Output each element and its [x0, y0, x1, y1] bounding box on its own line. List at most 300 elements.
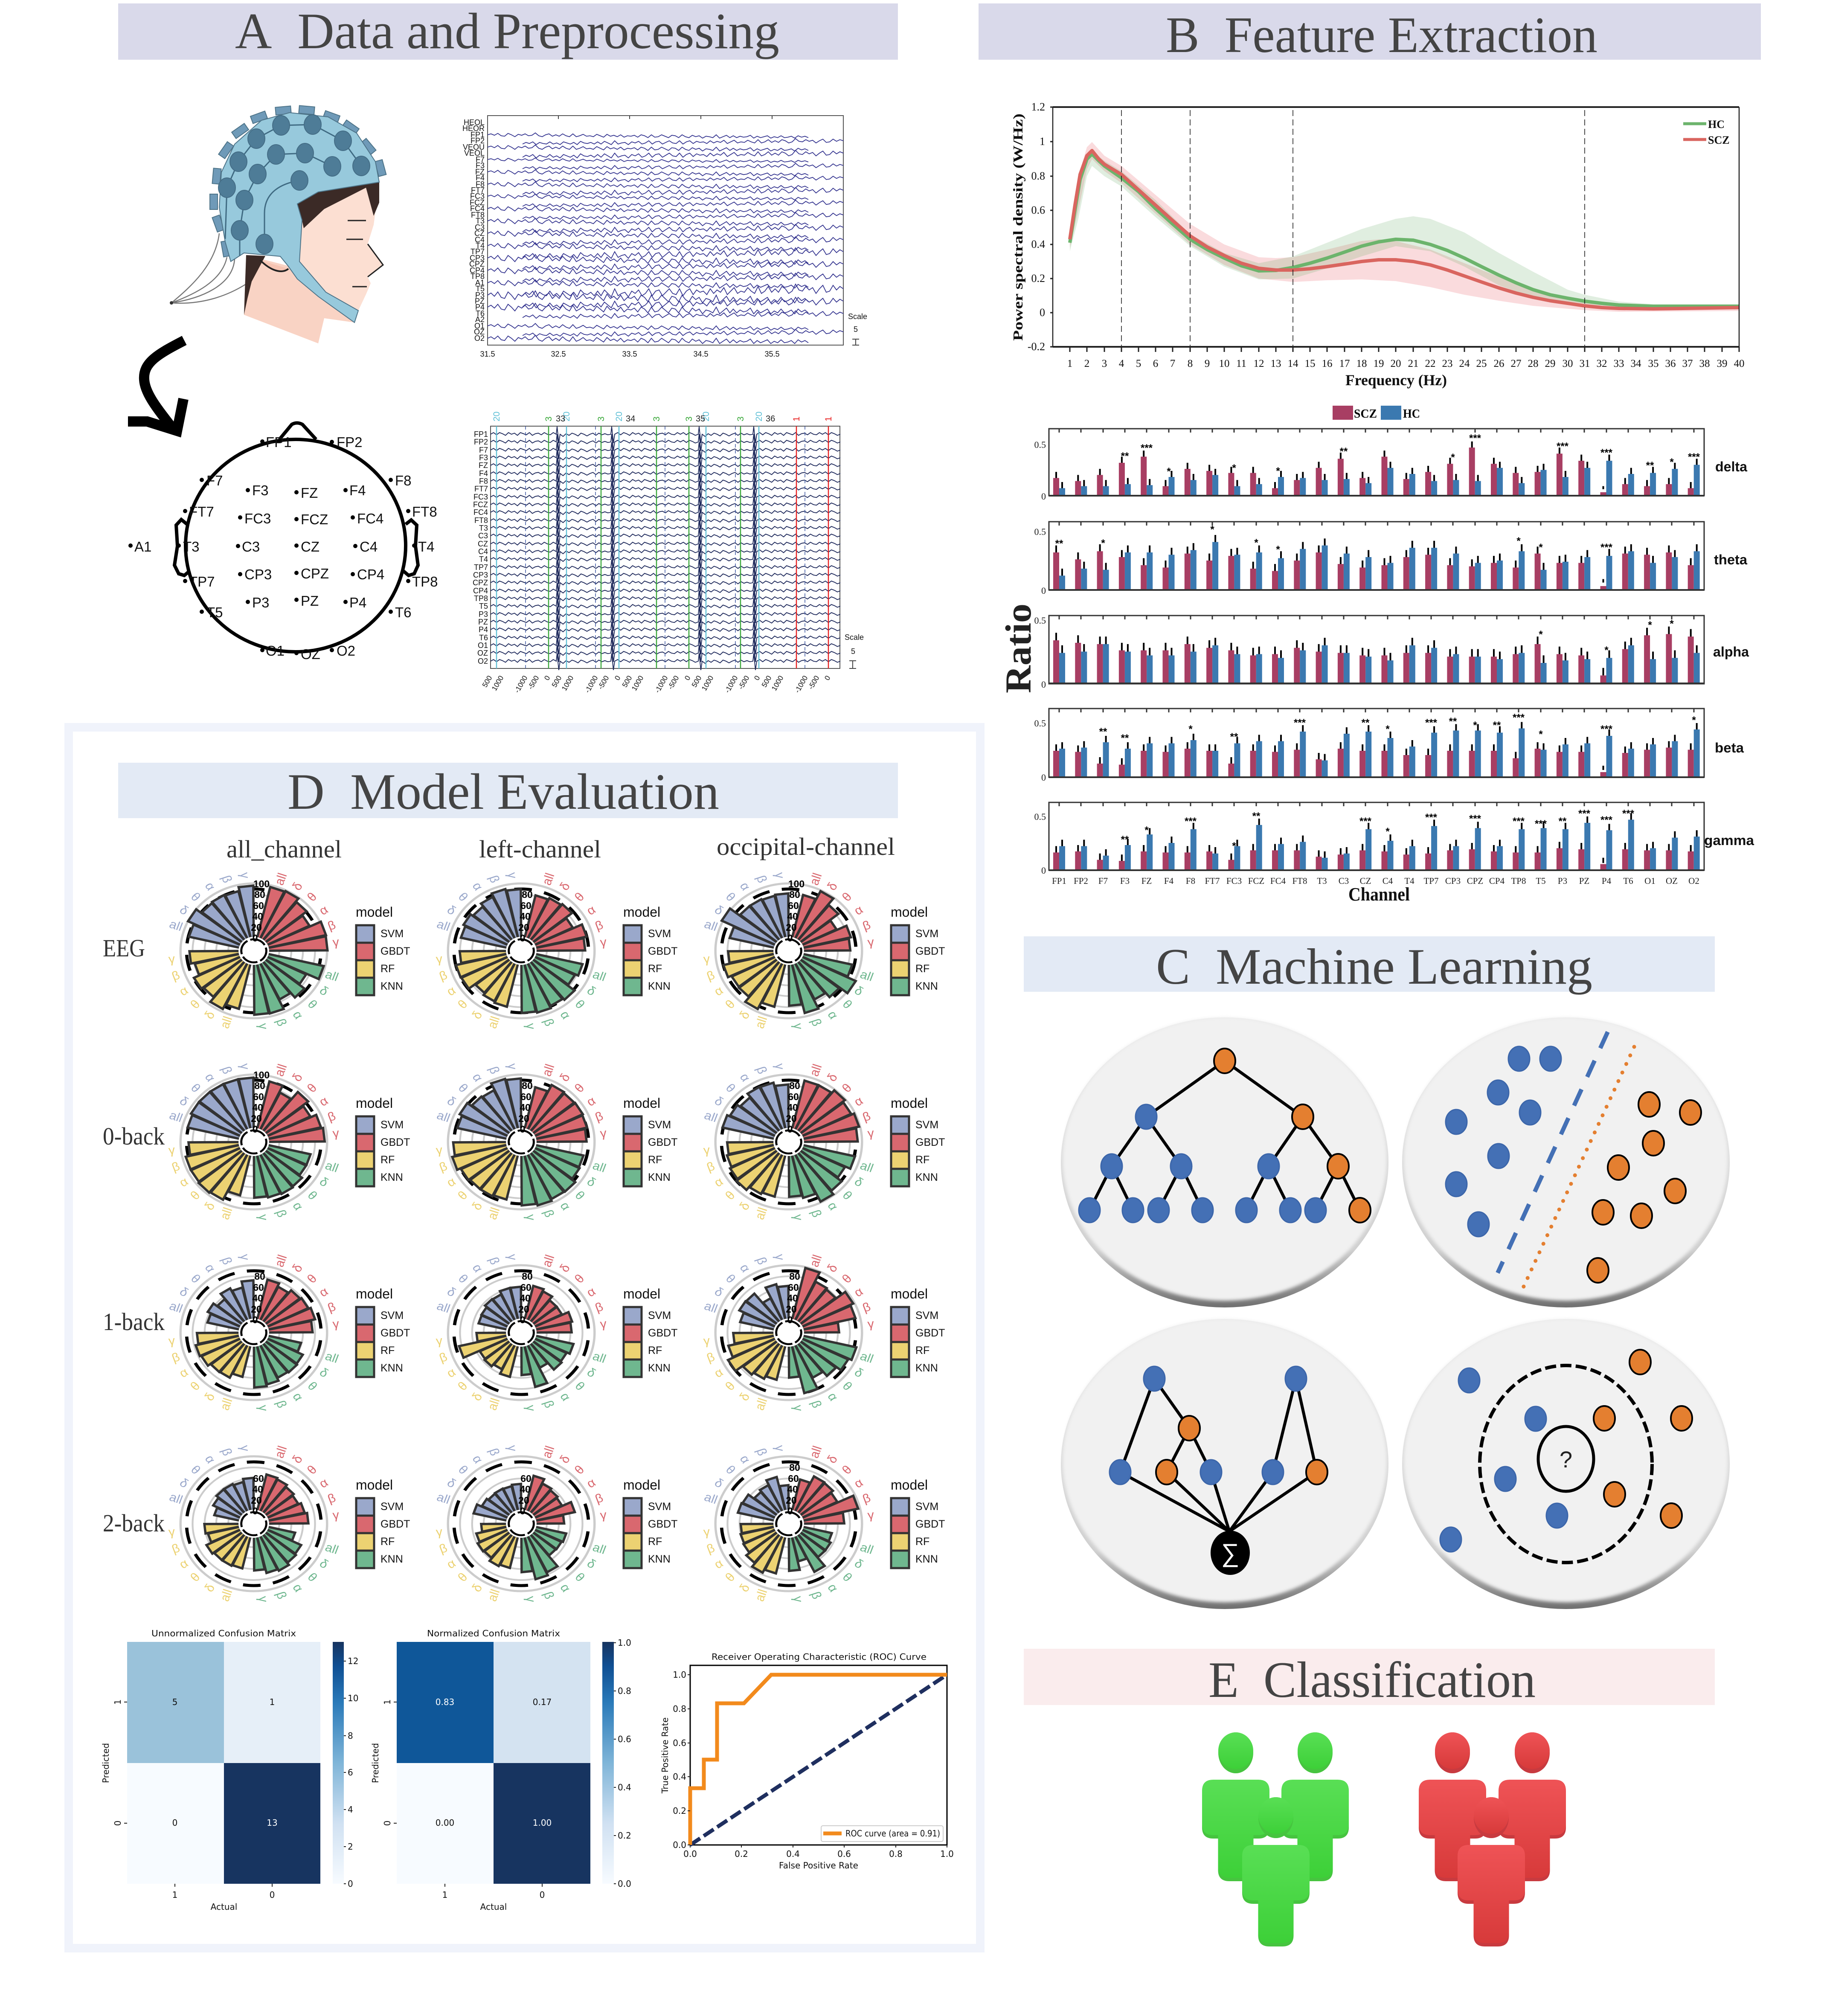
bar chart: gamma band: *: [1144, 825, 1149, 836]
rosette: 1-back left-channel: 0: [520, 1314, 525, 1325]
chart: epoched EEG traces with event markers: O1: [478, 641, 488, 650]
chart: epoched EEG traces with event markers: 1000: [560, 674, 575, 692]
rosette: 0-back occipital-channel: all: [807, 1063, 825, 1078]
bar chart: alpha band: 0.5: [1034, 615, 1046, 626]
chart: power spectral density HC vs SCZ: 26: [1494, 358, 1504, 369]
chart: normalized confusion matrix: 0.83: [436, 1697, 454, 1707]
chart: normalized confusion matrix: 0.2: [618, 1830, 631, 1841]
diagram: 10-20 electrode layout: T3: [183, 539, 200, 555]
rosette: 1-back occipital-channel: γ: [790, 1404, 805, 1412]
legend: SCZ and HC bars: HC: [1403, 407, 1420, 421]
rosette: 1-back occipital-channel: θ: [839, 1272, 855, 1286]
bar chart: delta band: ***: [1141, 442, 1153, 454]
chart: epoched EEG traces with event markers: CP4: [473, 587, 488, 595]
diagram: random forest ensemble: [1061, 1319, 1388, 1609]
bar chart: gamma band: gamma: [1704, 833, 1754, 848]
rosette: 1-back left-channel: β: [593, 1300, 605, 1315]
rosette: 2-back occipital-channel: 40: [787, 1484, 798, 1495]
rosette: 1-back occipital-channel: δ: [825, 1262, 840, 1275]
chart: ROC curve: 0.2: [673, 1806, 686, 1816]
rosette: 2-back occipital-channel: δ: [852, 1557, 866, 1572]
chart: epoched EEG traces with event markers: 500: [760, 674, 773, 689]
chart: raw continuous EEG traces: 32.5: [551, 350, 566, 358]
chart: ROC curve: 0.8: [673, 1704, 686, 1714]
bar chart: delta band: ***: [1688, 451, 1700, 463]
chart: normalized confusion matrix: 0.4: [618, 1782, 631, 1792]
chart: raw continuous EEG traces: T5: [476, 285, 485, 293]
rosette: EEG left-channel: δ: [470, 1009, 485, 1022]
axis: EEG channel names: FT7: [1205, 876, 1220, 886]
rosette: EEG left-channel: γ: [435, 953, 443, 966]
chart: epoched EEG traces with event markers: FP1: [474, 430, 488, 439]
chart: epoched EEG traces with event markers: [473, 412, 864, 694]
bar chart: delta band: 0: [1041, 491, 1046, 502]
heading: A Data and Preprocessing: [118, 3, 898, 60]
chart: unnormalized confusion matrix: Predicted: [101, 1743, 111, 1783]
rosette: 0-back occipital-channel: β: [861, 1110, 872, 1124]
rosette: EEG occipital-channel: γ: [772, 871, 787, 879]
rosette: 0-back all_channel: 0: [253, 1124, 258, 1135]
rosette: 1-back left-channel: θ: [572, 1272, 587, 1286]
rosette: EEG left-channel: β: [438, 969, 449, 983]
chart: epoched EEG traces with event markers: F8: [479, 477, 488, 485]
bar chart: delta band: *: [1670, 456, 1674, 468]
rosette: 1-back all_channel: all: [323, 1350, 340, 1366]
rosette: 1-back all_channel: δ: [177, 1285, 191, 1300]
rosette: 0-back left-channel: γ: [435, 1144, 443, 1157]
rosette: 2-back occipital-channel: α: [712, 1557, 726, 1572]
rosette: EEG left-channel: [435, 871, 677, 1030]
rosette: EEG left-channel: 20: [518, 922, 529, 933]
chart: power spectral density HC vs SCZ: 37: [1682, 358, 1693, 369]
rosette: 0-back occipital-channel: δ: [737, 1200, 753, 1213]
chart: raw continuous EEG traces: F8: [476, 180, 485, 189]
chart: epoched EEG traces with event markers: TP8: [474, 594, 488, 603]
bar chart: gamma band: **: [1121, 834, 1129, 845]
chart: raw continuous EEG traces: CP3: [470, 254, 485, 262]
bar chart: alpha band: alpha: [1713, 644, 1749, 659]
rosette: 0-back left-channel: KNN: [648, 1171, 671, 1183]
axis label: Channel: Channel: [1348, 884, 1410, 905]
rosette: EEG left-channel: α: [557, 1009, 573, 1022]
bar chart: delta band: ***: [1557, 441, 1569, 452]
chart: power spectral density HC vs SCZ: 2: [1084, 358, 1089, 369]
bar chart: delta band: 0.5: [1034, 439, 1046, 450]
bar chart: delta band: *: [1276, 465, 1280, 477]
chart: epoched EEG traces with event markers: -1000: [793, 674, 809, 694]
chart: power spectral density HC vs SCZ: 10: [1219, 358, 1229, 369]
rosette: 2-back left-channel: θ: [455, 1463, 471, 1477]
rosette: 2-back all_channel: all: [218, 1588, 235, 1603]
rosette: 0-back left-channel: δ: [470, 1200, 485, 1213]
rosette: 0-back all_channel: γ: [256, 1214, 270, 1221]
heading: B Feature Extraction: [979, 3, 1761, 63]
rosette: 1-back occipital-channel: KNN: [915, 1362, 938, 1374]
chart: epoched EEG traces with event markers: F4: [479, 469, 488, 478]
rosette: 1-back occipital-channel: SVM: [915, 1310, 938, 1322]
rosette: 1-back left-channel: GBDT: [648, 1327, 677, 1339]
rosette: 0-back all_channel: θ: [188, 1189, 203, 1203]
bar chart: theta band: [1034, 522, 1747, 596]
rosette: 0-back left-channel: α: [469, 1071, 485, 1084]
rosette: EEG all_channel: θ: [305, 998, 320, 1011]
rosette: 0-back left-channel: RF: [648, 1154, 662, 1166]
rosette: 0-back left-channel: 80: [522, 1080, 533, 1091]
rosette: 1-back left-channel: 80: [522, 1271, 533, 1282]
diagram: 10-20 electrode layout: T4: [418, 539, 435, 555]
rosette: 1-back occipital-channel: δ: [712, 1285, 726, 1300]
rosette: 0-back occipital-channel: α: [712, 1175, 726, 1190]
bar chart: gamma band: **: [1559, 816, 1567, 827]
chart: raw continuous EEG traces: VEOU: [463, 143, 485, 151]
diagram: 10-20 electrode layout: C4: [360, 539, 378, 555]
rosette: 2-back all_channel: SVM: [380, 1501, 404, 1513]
rosette: EEG all_channel: KNN: [380, 980, 403, 992]
diagram: k nearest neighbours: [1402, 1319, 1730, 1609]
chart: epoched EEG traces with event markers: T4: [479, 555, 488, 564]
rosette: EEG all_channel: δ: [177, 903, 191, 918]
rosette: EEG all_channel: δ: [290, 880, 305, 893]
rosette: 2-back occipital-channel: 80: [789, 1462, 800, 1473]
rosette: EEG occipital-channel: θ: [839, 998, 855, 1011]
chart: epoched EEG traces with event markers: FP2: [474, 438, 488, 446]
rosette: EEG left-channel: θ: [455, 890, 471, 904]
rosette: 2-back occipital-channel: model: [891, 1477, 928, 1493]
rosette: 2-back left-channel: α: [557, 1582, 573, 1595]
rosette: 1-back occipital-channel: 80: [789, 1271, 800, 1282]
chart: raw continuous EEG traces: HEOL: [464, 118, 485, 127]
rosette: 0-back occipital-channel: γ: [703, 1144, 711, 1157]
rosette: 0-back all_channel: KNN: [380, 1171, 403, 1183]
chart: epoched EEG traces with event markers: 1: [824, 416, 834, 421]
chart: unnormalized confusion matrix: 0: [348, 1879, 353, 1889]
rosette: EEG all_channel: RF: [380, 963, 395, 975]
chart: ROC curve: 0.0: [683, 1849, 697, 1859]
chart: raw continuous EEG traces: [462, 116, 867, 358]
diagram: 10-20 electrode layout: CP4: [357, 566, 384, 582]
rosette: 1-back left-channel: γ: [435, 1334, 443, 1348]
rosette: EEG all_channel: δ: [202, 1009, 218, 1022]
rosette: 1-back left-channel: model: [623, 1286, 660, 1301]
chart: power spectral density HC vs SCZ: 1.2: [1031, 101, 1045, 113]
diagram: 10-20 electrode layout: FCZ: [301, 511, 328, 527]
diagram: 10-20 electrode layout: FP1: [266, 434, 292, 450]
bar chart: beta band: ***: [1600, 723, 1613, 735]
rosette: 0-back left-channel: γ: [599, 1127, 607, 1140]
bar chart: alpha band: 0: [1041, 679, 1046, 690]
rosette: EEG occipital-channel: all: [702, 918, 719, 934]
bar chart: gamma band: ***: [1578, 808, 1591, 819]
rosette: EEG occipital-channel: γ: [867, 935, 875, 949]
chart: epoched EEG traces with event markers: 0: [823, 674, 832, 682]
axis: EEG channel names: FC3: [1226, 876, 1242, 886]
rosette: 1-back left-channel: α: [469, 1262, 485, 1275]
rosette: 0-back left-channel: 20: [518, 1113, 529, 1124]
heading: C Machine Learning: C Machine Learning: [1156, 938, 1592, 995]
rosette: 0-back occipital-channel: δ: [825, 1071, 840, 1084]
chart: epoched EEG traces with event markers: CZ: [478, 540, 488, 548]
rosette: EEG left-channel: θ: [455, 998, 471, 1011]
diagram: 10-20 electrode layout: CP3: [244, 566, 272, 582]
chart: epoched EEG traces with event markers: FC3: [473, 493, 488, 501]
chart: epoched EEG traces with event markers: 5: [851, 647, 855, 656]
rosette: 1-back all_channel: [167, 1253, 410, 1412]
chart: raw continuous EEG traces: TP7: [471, 247, 485, 256]
rosette: 2-back all_channel: α: [290, 1582, 306, 1595]
rosette: 0-back occipital-channel: all: [858, 1159, 875, 1175]
rosette: 1-back all_channel: α: [202, 1262, 218, 1275]
rosette: EEG occipital-channel: α: [737, 880, 753, 893]
rosette: EEG occipital-channel: γ: [790, 1023, 805, 1030]
axis: EEG channel names: FC4: [1270, 876, 1286, 886]
rosette: 0-back occipital-channel: β: [753, 1065, 770, 1076]
rosette: 0-back all_channel: model: [356, 1095, 393, 1111]
chart: epoched EEG traces with event markers: 0: [752, 674, 761, 682]
rosette: EEG left-channel: γ: [505, 871, 520, 879]
rosette: 1-back occipital-channel: α: [737, 1262, 753, 1275]
rosette: EEG occipital-channel: γ: [703, 953, 711, 966]
rosette: 2-back all_channel: β: [326, 1491, 337, 1506]
axis: EEG channel names: TP8: [1511, 876, 1526, 886]
rosette: 1-back all_channel: KNN: [380, 1362, 403, 1374]
rosette: 0-back occipital-channel: all: [702, 1109, 719, 1125]
rosette: 1-back all_channel: SVM: [380, 1310, 404, 1322]
rosette: EEG all_channel: all: [323, 968, 340, 984]
rosette: 2-back left-channel: γ: [599, 1508, 607, 1522]
rosette: 1-back all_channel: α: [290, 1391, 306, 1403]
rosette: 0-back left-channel: all: [540, 1063, 558, 1078]
rosette: 1-back occipital-channel: θ: [723, 1272, 738, 1286]
rosette: 1-back left-channel: KNN: [648, 1362, 671, 1374]
rosette: 2-back left-channel: RF: [648, 1536, 662, 1548]
panel: D Model Evaluation frame: [69, 727, 980, 1948]
chart: power spectral density HC vs SCZ: [1010, 101, 1745, 389]
rosette: 0-back left-channel: 40: [520, 1102, 531, 1113]
rosette: 2-back occipital-channel: α: [737, 1453, 753, 1466]
chart: power spectral density HC vs SCZ: 6: [1153, 358, 1158, 369]
rosette: 1-back occipital-channel: θ: [839, 1380, 855, 1393]
chart: raw continuous EEG traces: C4: [475, 235, 485, 244]
chart: epoched EEG traces with event markers: TP7: [474, 563, 488, 572]
bar chart: theta band: ***: [1600, 542, 1613, 553]
chart: raw continuous EEG traces: Scale: [848, 312, 867, 321]
rosette: 1-back occipital-channel: model: [891, 1286, 928, 1301]
chart: power spectral density HC vs SCZ: SCZ: [1708, 134, 1730, 146]
rosette: 0-back left-channel: θ: [572, 1081, 587, 1095]
rosette: 1-back all_channel: β: [326, 1300, 337, 1315]
axis: EEG channel names: CZ: [1360, 876, 1371, 886]
rosette: 0-back all_channel: SVM: [380, 1119, 404, 1131]
rosette: EEG all_channel: 100: [253, 878, 270, 889]
rosette: 1-back all_channel: GBDT: [380, 1327, 410, 1339]
chart: power spectral density HC vs SCZ: Frequency (Hz): [1345, 372, 1447, 389]
chart: power spectral density HC vs SCZ: HC: [1708, 118, 1725, 131]
chart: raw continuous EEG traces: T3: [476, 217, 485, 225]
rosette: 2-back left-channel: SVM: [648, 1501, 671, 1513]
rosette: 0-back all_channel: β: [170, 1160, 182, 1174]
rosette: 2-back occipital-channel: β: [753, 1447, 770, 1458]
diagram: 10-20 electrode layout: T5: [206, 604, 223, 620]
rosette: 1-back occipital-channel: [702, 1253, 945, 1412]
rosette: 0-back left-channel: δ: [557, 1071, 573, 1084]
rosette: 1-back all_channel: model: [356, 1286, 393, 1301]
rosette: 0-back all_channel: θ: [188, 1081, 203, 1095]
chart: power spectral density HC vs SCZ: 24: [1459, 358, 1470, 369]
rosette: 0-back occipital-channel: α: [852, 1094, 866, 1109]
rosette: 0-back all_channel: RF: [380, 1154, 395, 1166]
diagram: 10-20 electrode layout: FT8: [412, 504, 437, 520]
bar chart: beta band: **: [1362, 717, 1370, 729]
rosette: 1-back occipital-channel: 40: [787, 1293, 798, 1304]
rosette: 0-back left-channel: γ: [505, 1063, 520, 1070]
rosette: 0-back left-channel: [435, 1063, 677, 1221]
chart: raw continuous EEG traces: HEOR: [462, 124, 485, 133]
rosette: 2-back occipital-channel: θ: [839, 1463, 855, 1477]
rosette: 1-back left-channel: RF: [648, 1345, 662, 1357]
diagram: 10-20 electrode layout: FT7: [189, 504, 214, 520]
rosette: 1-back occipital-channel: δ: [737, 1391, 753, 1403]
bar chart: beta band: *: [1385, 723, 1390, 735]
rosette: 0-back all_channel: all: [218, 1206, 235, 1221]
chart: power spectral density HC vs SCZ: 22: [1425, 358, 1436, 369]
rosette: EEG all_channel: all: [218, 1015, 235, 1030]
column and row titles: occipital-channel: [717, 833, 895, 860]
rosette: 2-back all_channel: β: [170, 1542, 182, 1556]
chart: epoched EEG traces with event markers: PZ: [478, 618, 488, 626]
rosette: 1-back all_channel: all: [272, 1253, 290, 1269]
chart: raw continuous EEG traces: FCZ: [470, 198, 485, 207]
chart: raw continuous EEG traces: F4: [476, 174, 485, 182]
rosette: 2-back left-channel: θ: [572, 1463, 587, 1477]
chart: unnormalized confusion matrix: 10: [348, 1693, 358, 1703]
chart: normalized confusion matrix: 0: [382, 1821, 392, 1826]
rosette: 0-back occipital-channel: δ: [852, 1175, 866, 1190]
rosette: 1-back occipital-channel: 0: [787, 1314, 793, 1325]
chart: epoched EEG traces with event markers: 1000: [490, 674, 505, 692]
chart: epoched EEG traces with event markers: CP3: [473, 571, 488, 579]
rosette: 2-back occipital-channel: RF: [915, 1536, 929, 1548]
rosette: 1-back all_channel: θ: [188, 1272, 203, 1286]
rosette: 0-back occipital-channel: 80: [789, 1080, 800, 1091]
chart: epoched EEG traces with event markers: Scale: [845, 633, 864, 642]
chart: unnormalized confusion matrix: 1: [172, 1890, 177, 1900]
rosette: 0-back occipital-channel: [702, 1063, 945, 1221]
chart: unnormalized confusion matrix: 0: [270, 1890, 275, 1900]
chart: power spectral density HC vs SCZ: 33: [1613, 358, 1624, 369]
rosette: 0-back left-channel: model: [623, 1095, 660, 1111]
diagram: random forest ensemble: ∑: [1221, 1539, 1239, 1567]
rosette: 2-back left-channel: θ: [455, 1571, 471, 1584]
rosette: 1-back left-channel: δ: [584, 1365, 598, 1380]
chart: ROC curve: ROC curve (area = 0.91): [845, 1828, 940, 1839]
rosette: EEG occipital-channel: β: [705, 969, 717, 983]
column and row titles: EEG: [103, 934, 145, 962]
axis: EEG channel names: O1: [1644, 876, 1656, 886]
chart: raw continuous EEG traces: F3: [476, 161, 485, 170]
bar chart: delta band: *: [1167, 466, 1171, 477]
rosette: 0-back all_channel: 100: [253, 1069, 270, 1081]
bar chart: beta band: 0.5: [1034, 718, 1046, 729]
rosette: 2-back left-channel: model: [623, 1477, 660, 1493]
rosette: 1-back left-channel: γ: [523, 1404, 538, 1412]
diagram: 10-20 electrode layout: F4: [349, 482, 366, 498]
rosette: 0-back all_channel: α: [290, 1200, 306, 1213]
rosette: 0-back occipital-channel: θ: [839, 1081, 855, 1095]
rosette: EEG left-channel: RF: [648, 963, 662, 975]
bar chart: beta band: **: [1493, 720, 1501, 731]
rosette: EEG all_channel: β: [218, 874, 235, 885]
rosette: EEG occipital-channel: θ: [723, 890, 738, 904]
bar chart: theta band: *: [1210, 524, 1214, 535]
axis: EEG channel names: C3: [1339, 876, 1349, 886]
arrow: from head to electrode map: [128, 340, 184, 431]
rosette: 0-back left-channel: θ: [455, 1081, 471, 1095]
rosette: 0-back left-channel: δ: [584, 1175, 598, 1190]
rosette: 2-back all_channel: δ: [177, 1476, 191, 1491]
rosette: 1-back occipital-channel: δ: [852, 1365, 866, 1380]
rosette: 1-back all_channel: θ: [188, 1380, 203, 1393]
rosette: 2-back occipital-channel: β: [705, 1542, 717, 1556]
rosette: 1-back all_channel: β: [218, 1255, 235, 1267]
rosette: 2-back occipital-channel: SVM: [915, 1501, 938, 1513]
chart: power spectral density HC vs SCZ: 30: [1562, 358, 1573, 369]
chart: power spectral density HC vs SCZ: 21: [1408, 358, 1419, 369]
chart: epoched EEG traces with event markers: -500: [666, 674, 680, 691]
rosette: 2-back left-channel: 40: [520, 1484, 531, 1495]
chart: epoched EEG traces with event markers: 36: [766, 414, 775, 424]
chart: epoched EEG traces with event markers: -500: [526, 674, 540, 691]
diagram: decision tree: [1061, 1017, 1388, 1307]
rosette: 1-back occipital-channel: 60: [788, 1282, 799, 1293]
rosette: 0-back left-channel: θ: [455, 1189, 471, 1203]
rosette: 1-back all_channel: γ: [332, 1317, 340, 1331]
rosette: 0-back all_channel: θ: [305, 1189, 320, 1203]
rosette: EEG left-channel: GBDT: [648, 945, 677, 957]
rosette: 0-back occipital-channel: θ: [723, 1081, 738, 1095]
rosette: 0-back all_channel: α: [317, 1094, 331, 1109]
rosette: 0-back occipital-channel: all: [752, 1206, 770, 1221]
rosette: 0-back all_channel: 40: [252, 1102, 263, 1113]
bar chart: alpha band: *: [1539, 629, 1543, 640]
rosette: 1-back occipital-channel: α: [852, 1285, 866, 1300]
rosette: EEG occipital-channel: δ: [825, 880, 840, 893]
rosette: 2-back all_channel: all: [272, 1444, 290, 1460]
diagram: 10-20 electrode layout: CPZ: [301, 566, 329, 581]
rosette: 1-back all_channel: 0: [253, 1314, 258, 1325]
rosette: 0-back occipital-channel: 60: [788, 1091, 799, 1102]
chart: ROC curve: 0.4: [786, 1849, 800, 1859]
chart: raw continuous EEG traces: VEOL: [464, 149, 485, 157]
rosette: 1-back occipital-channel: β: [808, 1399, 824, 1410]
rosette: 2-back left-channel: γ: [505, 1444, 520, 1452]
rosette: 1-back left-channel: γ: [599, 1317, 607, 1331]
rosette: 2-back all_channel: 40: [252, 1484, 263, 1495]
rosette: 0-back left-channel: SVM: [648, 1119, 671, 1131]
rosette: 0-back left-channel: α: [444, 1175, 458, 1190]
diagram: 10-20 electrode layout: FC3: [244, 511, 271, 526]
axis: EEG channel names: FCZ: [1248, 876, 1264, 886]
rosette: 2-back occipital-channel: δ: [825, 1453, 840, 1466]
rosette: EEG occipital-channel: α: [825, 1009, 841, 1022]
chart: power spectral density HC vs SCZ: 18: [1356, 358, 1367, 369]
chart: raw continuous EEG traces: C3: [475, 223, 485, 232]
axis: EEG channel names: T6: [1623, 876, 1633, 886]
chart: epoched EEG traces with event markers: 20: [701, 412, 711, 421]
rosette: 2-back all_channel: all: [323, 1541, 340, 1557]
rosette: EEG occipital-channel: 100: [788, 878, 805, 889]
rosette: EEG all_channel: α: [202, 880, 218, 893]
rosette: EEG left-channel: 0: [520, 932, 525, 944]
